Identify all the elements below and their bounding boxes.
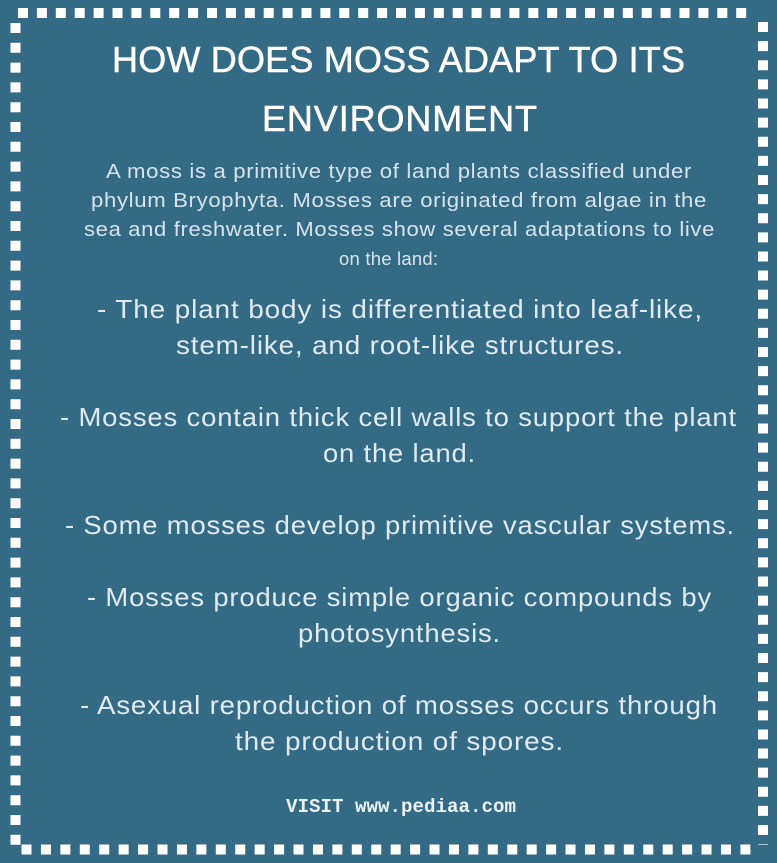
adaptation: spores: - Asexual reproduction of mosses occurs through [80,690,718,720]
adaptation: plant body: - The plant body is differentiated into leaf-like, [97,294,703,324]
adaptation: photosynthesis: photosynthesis. [298,618,501,648]
adaptation: cell walls [60,402,737,468]
title: ENVIRONMENT [262,98,537,139]
footer source link: VISIT www.pediaa.com [286,796,516,818]
adaptation: plant body [97,294,703,360]
title [112,39,685,139]
adaptation: photosynthesis: - Mosses produce simple organic compounds by [87,582,712,612]
adaptation: cell walls: - Mosses contain thick cell walls to support the plant [60,402,737,432]
adaptation: vascular systems: - Some mosses develop primitive vascular systems. [65,510,735,540]
adaptation: spores: the production of spores. [235,726,564,756]
intro paragraph: on the land: [339,248,438,269]
intro paragraph: phylum Bryophyta. Mosses are originated from algae in the [91,190,707,212]
intro paragraph [84,161,715,269]
intro paragraph: A moss is a primitive type of land plants classified under [106,161,692,183]
adaptation: plant body: stem-like, and root-like structures. [176,330,624,360]
adaptation: spores [80,690,718,756]
adaptation: photosynthesis [87,582,712,648]
adaptation: cell walls: on the land. [323,438,476,468]
title: HOW DOES MOSS ADAPT TO ITS [112,39,685,80]
intro paragraph: sea and freshwater. Mosses show several adaptations to live [84,219,715,241]
